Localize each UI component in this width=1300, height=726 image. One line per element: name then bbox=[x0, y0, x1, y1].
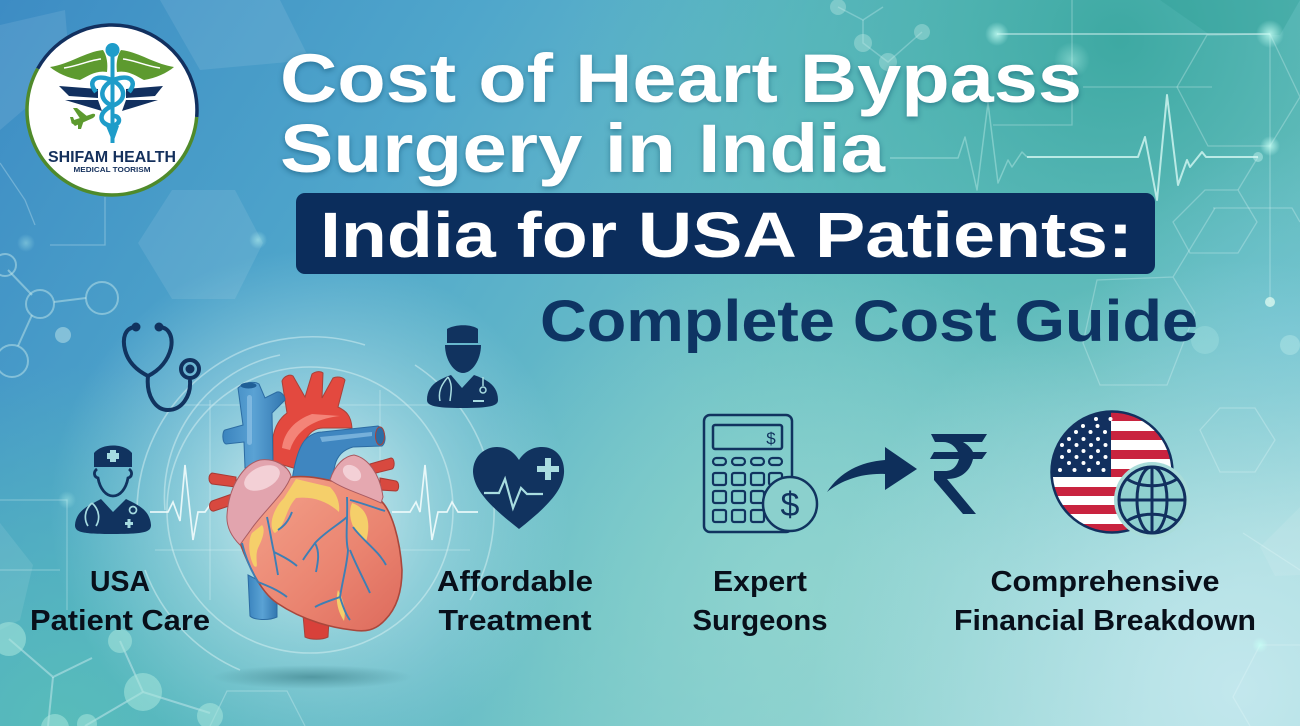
label: Affordable Treatment bbox=[437, 566, 593, 637]
icon: surgeon bbox=[427, 325, 498, 408]
label: Comprehensive Financial Breakdown bbox=[954, 566, 1256, 637]
red side vessels bbox=[209, 458, 399, 511]
logo caduceus bbox=[92, 43, 133, 143]
ventricles bbox=[240, 477, 402, 631]
logo bbox=[26, 24, 198, 196]
logo tagline: MEDICAL TOORISM bbox=[74, 167, 151, 174]
heart illustration bbox=[209, 372, 402, 639]
molecule network: bottom left bbox=[0, 622, 223, 726]
label: Affordable Treatment: Treatment bbox=[438, 605, 592, 637]
superior vena cava bbox=[223, 382, 285, 468]
label: USA Patient Care: USA bbox=[90, 566, 150, 598]
icon: nurse bbox=[75, 446, 151, 534]
pulmonary artery bbox=[292, 426, 385, 495]
right atrium bbox=[330, 455, 383, 503]
inferior vena cava bbox=[248, 575, 277, 620]
vessel highlights bbox=[247, 395, 372, 445]
logo navy aeroplane wings bbox=[59, 86, 163, 111]
logo wings bbox=[50, 50, 174, 80]
ECG trace: right of heart bbox=[392, 465, 478, 540]
logo plane bbox=[70, 108, 95, 129]
label: USA Patient Care: Patient Care bbox=[30, 605, 210, 637]
arrow bbox=[827, 447, 917, 492]
title line 2: Surgery in India bbox=[280, 110, 886, 187]
left atrium bbox=[227, 460, 291, 545]
heart shadow bbox=[212, 665, 412, 689]
title line 1: Cost of Heart Bypass bbox=[280, 40, 1082, 117]
molecule network: left bbox=[0, 254, 118, 377]
icon: rupee bbox=[930, 434, 987, 514]
ECG trace: left of heart bbox=[150, 465, 210, 540]
icon: calculator bbox=[704, 415, 817, 532]
fat deposits bbox=[249, 479, 368, 621]
label: USA Patient Care bbox=[30, 566, 210, 637]
descending aorta stub bbox=[303, 615, 329, 639]
icon: calculator: $ bbox=[766, 429, 776, 448]
icon: calculator: $ bbox=[781, 486, 800, 524]
label: Expert Surgeons: Surgeons bbox=[692, 605, 828, 637]
ECG trace: upper right bbox=[890, 95, 1258, 200]
aortic arch bbox=[273, 372, 352, 470]
icon: heart with ECG and plus bbox=[473, 447, 564, 529]
label: Comprehensive Financial Breakdown: Comprehensive bbox=[990, 566, 1220, 598]
atrium highlights bbox=[240, 460, 364, 496]
molecule network: top right bbox=[830, 0, 930, 71]
label: Affordable Treatment: Affordable bbox=[437, 566, 593, 598]
title banner: India for USA Patients: bbox=[320, 199, 1133, 271]
logo name: SHIFAM HEALTH bbox=[48, 149, 176, 166]
label: Expert Surgeons bbox=[692, 566, 828, 637]
icon: US flag globe bbox=[1046, 410, 1190, 538]
coronary vessels bbox=[242, 497, 386, 620]
label: Expert Surgeons: Expert bbox=[713, 566, 807, 598]
label: Comprehensive Financial Breakdown: Financial Breakdown bbox=[954, 605, 1256, 637]
icon: stethoscope bbox=[124, 324, 199, 410]
glow rings and grid behind the heart bbox=[137, 337, 494, 670]
subtitle: Complete Cost Guide bbox=[540, 289, 1198, 354]
